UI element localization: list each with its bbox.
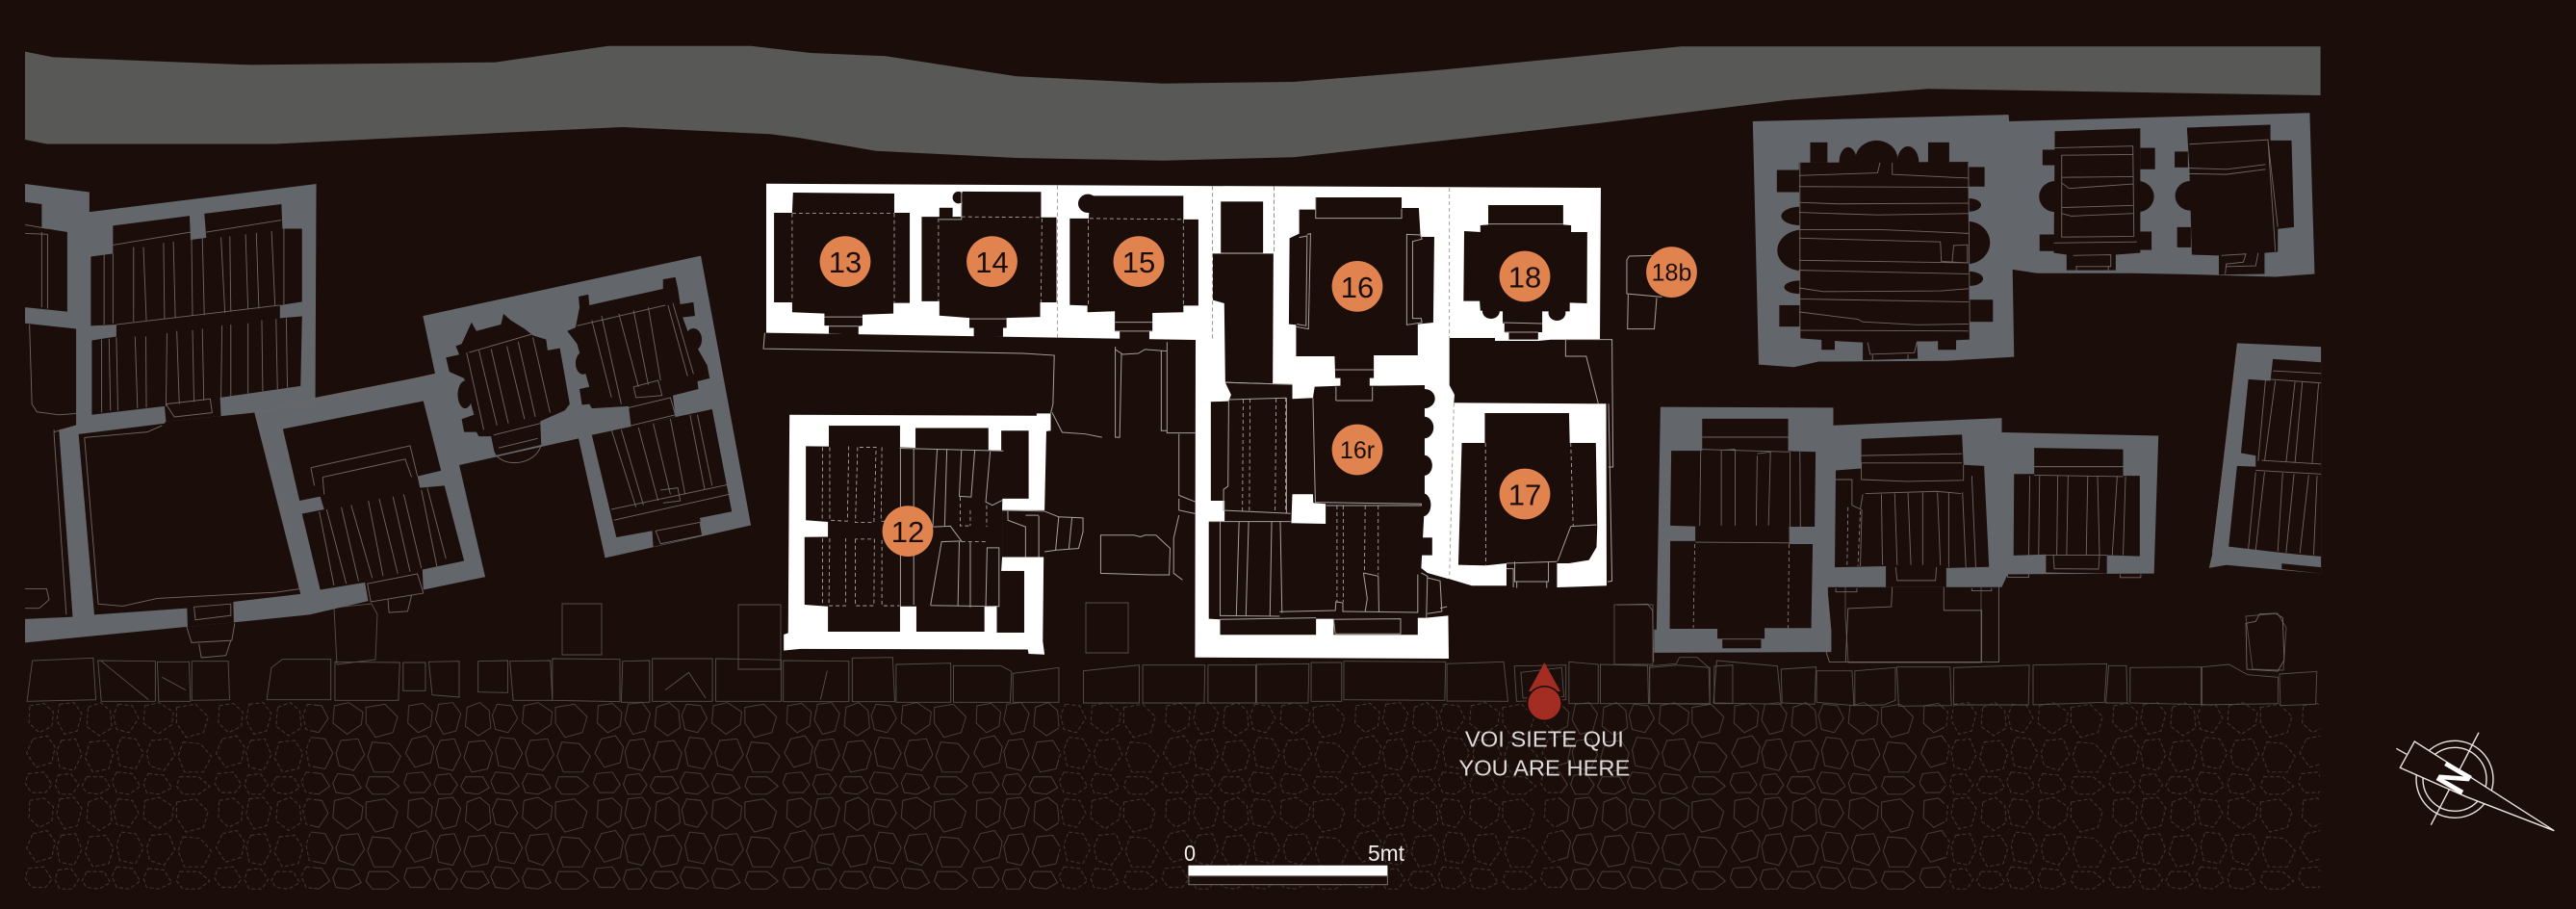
scale bar: 0 bbox=[1184, 841, 1196, 866]
marker 17: 17 bbox=[1508, 478, 1541, 512]
white block: chapel 12 bbox=[784, 413, 1051, 655]
lower room 1 bbox=[1670, 419, 1816, 648]
central white block bbox=[766, 184, 1607, 659]
dashed lines: separators right bbox=[1213, 186, 1454, 579]
grey wall mass: left group bbox=[25, 184, 751, 642]
temple large bbox=[1777, 141, 1993, 360]
marker 18b: 18b bbox=[1652, 260, 1691, 287]
scale bar: 5mt bbox=[1368, 841, 1405, 866]
chapel 18 bbox=[1463, 205, 1587, 340]
chapel 17 bbox=[1458, 413, 1597, 588]
left buildings grey bbox=[25, 184, 751, 658]
marker 18: 18 bbox=[1508, 260, 1541, 295]
scale bar bbox=[1184, 841, 1405, 885]
far right room bbox=[2228, 359, 2321, 574]
grey walls: lower right bbox=[1654, 407, 2158, 653]
column block bbox=[1213, 201, 1274, 383]
chapel 13 bbox=[774, 193, 910, 335]
marker 17 bbox=[1500, 469, 1550, 519]
plan lines: right buildings bbox=[1617, 140, 2321, 671]
marker 16: 16 bbox=[1341, 271, 1374, 304]
you are here label: YOU ARE HERE bbox=[1458, 756, 1630, 781]
room: far left bbox=[25, 202, 67, 312]
marker 12 bbox=[883, 506, 933, 557]
marker 16r: 16r bbox=[1340, 437, 1375, 464]
dashed lines: chapels 12-15 bbox=[792, 214, 1183, 606]
chapel 16r and lower complex bbox=[1209, 382, 1449, 635]
cobbled road bbox=[25, 701, 2320, 891]
lower room 2 bbox=[1835, 434, 1989, 587]
grey walls: far right bbox=[2209, 343, 2321, 574]
numbered markers bbox=[820, 236, 1697, 557]
temple left bbox=[446, 314, 570, 455]
you are here label: VOI SIETE QUI bbox=[1465, 727, 1624, 752]
marker 18 bbox=[1500, 251, 1550, 301]
you are here label bbox=[1458, 727, 1630, 781]
room: large courtyard bbox=[79, 413, 300, 627]
kerb stones row bbox=[27, 587, 2317, 706]
chapel 14 bbox=[921, 192, 1057, 337]
marker 13: 13 bbox=[829, 246, 862, 279]
you are here pin bbox=[1526, 662, 1562, 722]
marker 14: 14 bbox=[975, 246, 1009, 279]
marker 18b bbox=[1646, 247, 1697, 298]
marker 15 bbox=[1114, 236, 1164, 287]
compass north arrow: N bbox=[2427, 755, 2481, 801]
temple middle bbox=[2039, 128, 2155, 271]
lower room 3 bbox=[2014, 448, 2140, 574]
outlines between chapels bbox=[763, 333, 1196, 580]
marker 12: 12 bbox=[891, 515, 924, 549]
dashed lines: lower room bbox=[1693, 507, 1861, 628]
chapel row lines bbox=[824, 192, 1152, 608]
temple right bbox=[567, 277, 709, 427]
room: lower right tomb bbox=[592, 409, 732, 547]
plan lines: left group bbox=[25, 221, 730, 658]
temple right bbox=[2175, 124, 2294, 274]
marker 16r bbox=[1332, 425, 1382, 475]
chapel 16 bbox=[1289, 197, 1434, 386]
grey walls: upper right bbox=[1753, 113, 2314, 367]
dashed lines: chapels 16-17 bbox=[1243, 398, 1573, 602]
marker 13 bbox=[820, 236, 870, 287]
chapel 15 bbox=[1069, 195, 1198, 340]
marker 16 bbox=[1332, 261, 1382, 312]
plan lines: chapels 16-18 bbox=[1210, 197, 1662, 634]
marker 15: 15 bbox=[1122, 246, 1155, 279]
room: upper hall bbox=[90, 204, 302, 421]
compass north arrow bbox=[2396, 733, 2554, 831]
right buildings grey bbox=[1617, 113, 2321, 671]
room: middle tomb bbox=[283, 401, 464, 602]
marker 14 bbox=[966, 236, 1018, 287]
dashed lines: separators bbox=[1057, 186, 1274, 340]
chapel 12 interior bbox=[805, 426, 1029, 633]
river band bbox=[25, 46, 2321, 161]
